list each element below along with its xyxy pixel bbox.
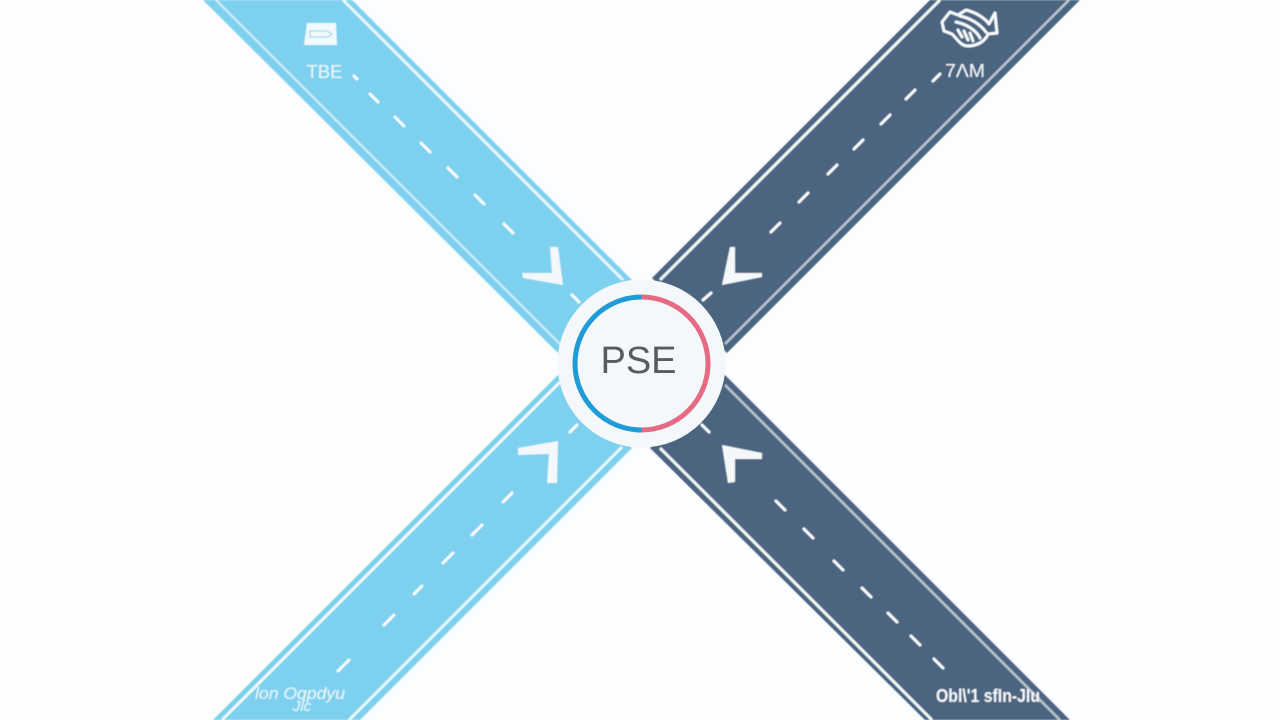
icon: card (304, 23, 337, 45)
icon: handshake (942, 10, 997, 46)
ring: blue half (575, 297, 642, 430)
label: bottom right: Obl\'1 sfIn-JIu (936, 686, 1040, 706)
road: top right, dark slate (652, 0, 1080, 353)
arrow: top right chevron (722, 247, 762, 285)
road: bottom left, light blue (213, 375, 632, 720)
label: bottom left: Jlc (292, 698, 312, 715)
label: top left: TBE (307, 61, 342, 82)
arrow: bottom right chevron (722, 445, 762, 483)
hub: central circle with two-colour ring (558, 280, 726, 448)
label: bottom left: lon Oqpdyu (255, 684, 346, 703)
label: top right: 7ΛM (945, 61, 985, 81)
hub label: PSE (600, 340, 677, 382)
arrow: top left chevron (522, 247, 563, 285)
road: bottom right, dark slate (650, 375, 1070, 720)
road: top left, light blue (203, 0, 632, 353)
label: bottom left (255, 684, 346, 715)
ring: red half (642, 297, 708, 430)
arrow: bottom left chevron (518, 441, 558, 483)
